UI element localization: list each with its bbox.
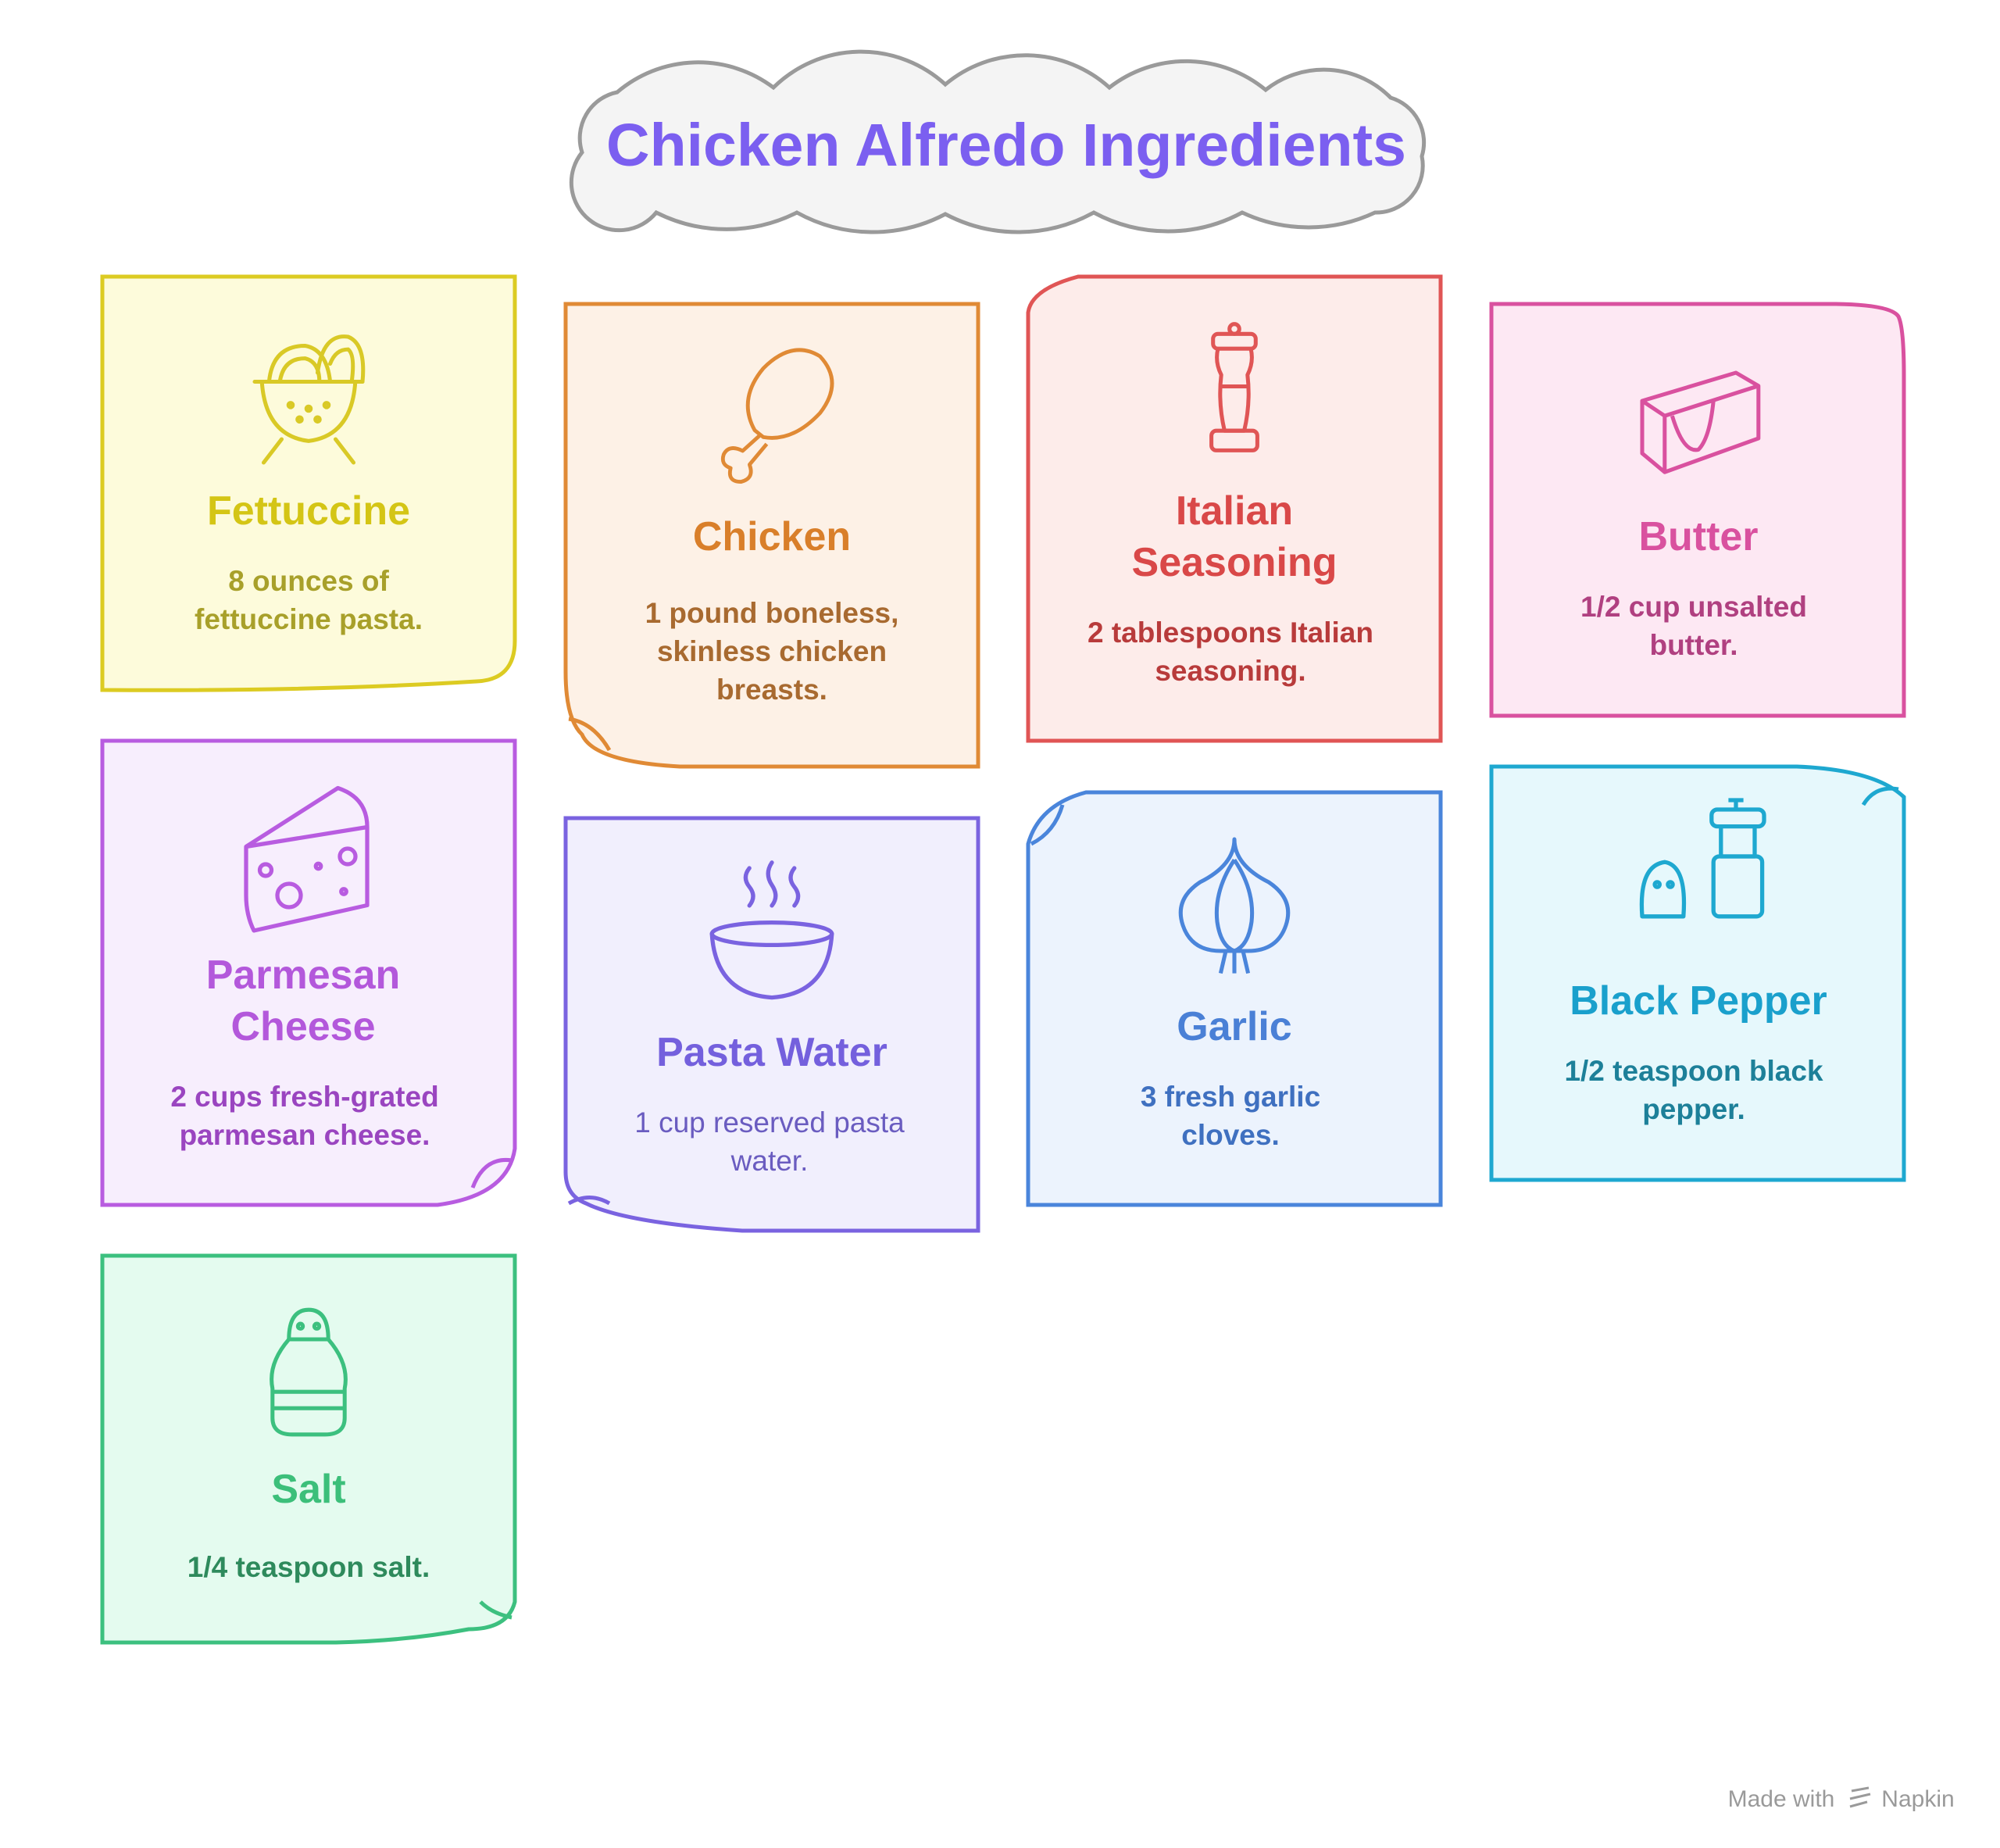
icon: pepper grinder and shaker xyxy=(1641,800,1764,917)
panel: parmesan xyxy=(102,741,515,1205)
title xyxy=(571,52,1424,232)
text: butter detail: 1/2 cup unsalted xyxy=(1580,591,1807,623)
text: fettuccine detail: fettuccine pasta. xyxy=(195,603,423,635)
watermark xyxy=(1728,1786,1955,1812)
panel: butter: Butter xyxy=(1638,514,1759,559)
panel: pasta water xyxy=(566,818,978,1231)
panel: salt xyxy=(102,1256,515,1642)
panel: pasta water: Pasta Water xyxy=(656,1030,888,1075)
icon: cheese xyxy=(246,788,367,931)
text: butter detail: butter. xyxy=(1649,629,1738,661)
panel: garlic: Garlic xyxy=(1177,1004,1292,1049)
icon: salt shaker xyxy=(272,1310,345,1435)
panel: parmesan: Parmesan xyxy=(206,953,400,998)
text: garlic detail: 3 fresh garlic xyxy=(1141,1081,1320,1113)
panel: italian seasoning: Italian xyxy=(1176,488,1293,534)
panel: chicken xyxy=(566,304,978,767)
icon: pasta bowl xyxy=(255,337,363,463)
icon: bowl with steam xyxy=(712,863,832,998)
icon: drumstick xyxy=(723,350,832,482)
title: Chicken Alfredo Ingredients xyxy=(606,112,1406,179)
text: pepper detail: pepper. xyxy=(1642,1093,1745,1125)
panel: fettuccine xyxy=(102,277,515,690)
text: pasta water detail: 1 cup reserved pasta xyxy=(634,1106,905,1138)
text: salt detail: 1/4 teaspoon salt. xyxy=(188,1551,430,1583)
text: garlic detail: cloves. xyxy=(1181,1119,1280,1151)
panel: garlic xyxy=(1028,792,1441,1205)
panel: black pepper: Black Pepper xyxy=(1570,978,1827,1024)
panel: italian seasoning: Seasoning xyxy=(1132,540,1337,585)
text: chicken detail: breasts. xyxy=(716,674,827,706)
text: chicken detail: skinless chicken xyxy=(657,635,887,667)
watermark: Napkin xyxy=(1881,1786,1955,1812)
text: chicken detail: 1 pound boneless, xyxy=(645,597,898,629)
panel: salt: Salt xyxy=(271,1467,346,1512)
text: pasta water detail: water. xyxy=(730,1145,808,1177)
panel: fettuccine: Fettuccine xyxy=(207,488,410,534)
text: seasoning detail: seasoning. xyxy=(1155,655,1306,687)
panel: butter xyxy=(1491,304,1904,716)
text: parmesan detail: parmesan cheese. xyxy=(180,1119,430,1151)
panel: italian seasoning xyxy=(1028,277,1441,741)
icon: butter block xyxy=(1642,373,1759,472)
panel: chicken: Chicken xyxy=(693,514,851,559)
text: parmesan detail: 2 cups fresh-grated xyxy=(170,1081,439,1113)
text: fettuccine detail: 8 ounces of xyxy=(228,565,389,597)
panel: parmesan: Cheese xyxy=(231,1004,375,1049)
icon: garlic xyxy=(1180,839,1288,974)
text: pepper detail: 1/2 teaspoon black xyxy=(1564,1055,1823,1087)
watermark: Made with xyxy=(1728,1786,1834,1812)
panel: black pepper xyxy=(1491,767,1904,1180)
text: seasoning detail: 2 tablespoons Italian xyxy=(1088,617,1373,649)
icon: grinder xyxy=(1212,324,1257,450)
